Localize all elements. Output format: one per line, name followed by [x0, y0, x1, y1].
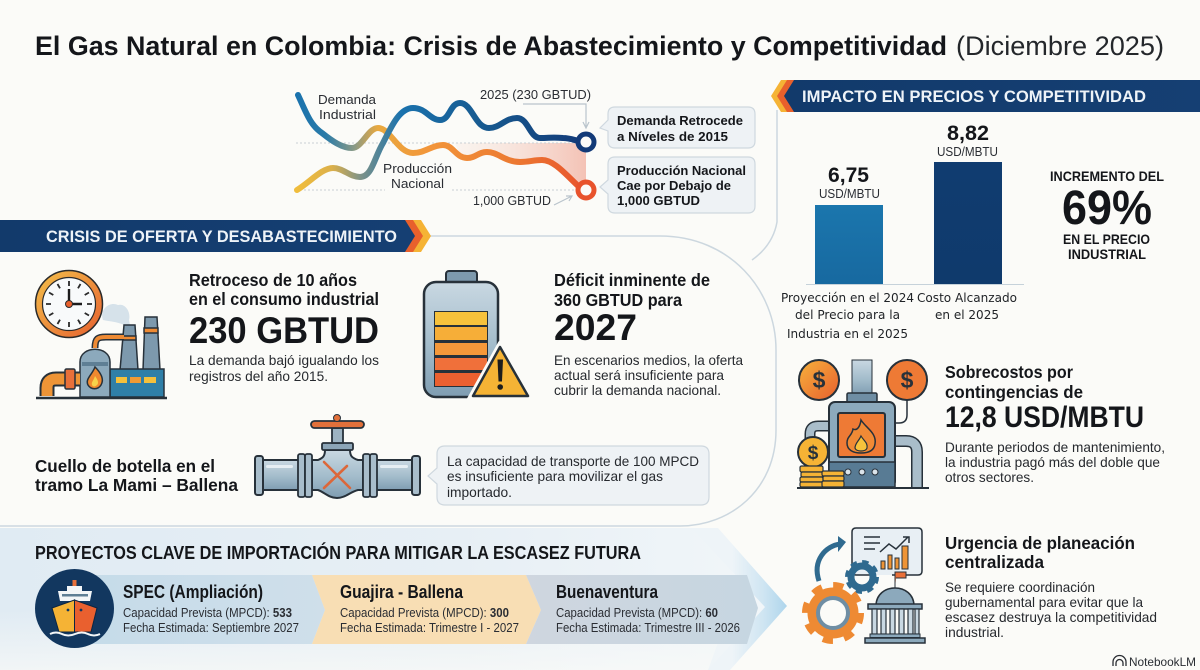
warning sign — [469, 343, 531, 399]
project: Buenaventura: Fecha Estimada: Trimestre III - 2026 — [556, 621, 740, 635]
tank — [80, 349, 110, 397]
bar: 2024 projection — [815, 205, 883, 284]
project: Buenaventura: Buenaventura — [556, 582, 659, 602]
text block: sobrecostos — [945, 362, 1165, 485]
text block: deficit: 2027 — [554, 307, 637, 348]
text block: sobrecostos: otros sectores. — [945, 469, 1034, 485]
icon: ship — [35, 569, 114, 648]
text block: urgencia — [945, 533, 1157, 640]
bar: 2025 cost — [934, 162, 1002, 284]
text block: urgencia: industrial. — [945, 624, 1004, 640]
arrow: 1000 GBTUD — [554, 196, 572, 205]
callout stat: 69 percent: INCREMENTO DEL — [1050, 168, 1164, 184]
chart reference lines — [296, 143, 586, 190]
large gear — [806, 586, 860, 640]
text block: deficit: Déficit inminente de — [554, 270, 710, 290]
project: Guajira - Ballena: Fecha Estimada: Trimestre I - 2027 — [340, 621, 519, 635]
small gear — [848, 563, 876, 591]
coin stacks — [800, 466, 844, 487]
callout stat: 69 percent — [1050, 168, 1164, 262]
text block: cuello de botella: Cuello de botella en el — [35, 456, 215, 476]
title: El Gas Natural en Colombia: Crisis de Abastecimiento y Competitividad — [35, 31, 947, 61]
project: Buenaventura — [526, 575, 758, 644]
ground — [36, 397, 167, 399]
text block: sobrecostos: Durante periodos de mantenimiento, — [945, 439, 1165, 455]
project: SPEC: SPEC (Ampliación) — [123, 582, 263, 602]
text block: retroceso — [189, 270, 379, 384]
label: demanda industrial: Industrial — [319, 108, 376, 122]
callout: capacidad de transporte: es insuficiente para movilizar el gas — [447, 468, 663, 484]
capitol — [876, 588, 914, 606]
banner: crisis de oferta: CRISIS DE OFERTA Y DESABASTECIMIENTO — [46, 227, 397, 246]
callout: capacidad de transporte — [428, 446, 709, 505]
text block: deficit: En escenarios medios, la oferta — [554, 352, 743, 368]
text block: sobrecostos: 12,8 USD/MBTU — [945, 401, 1144, 434]
text block: sobrecostos: contingencias de — [945, 382, 1083, 402]
panel: proyectos clave de importacion — [0, 528, 787, 670]
value: 8,82: USD/MBTU — [937, 145, 998, 159]
label: 2025 value: 2025 (230 GBTUD) — [480, 88, 591, 102]
arrow: 2025 value — [523, 104, 589, 128]
section heading: PROYECTOS CLAVE DE IMPORTACIÓN PARA MITIGAR LA ESCASEZ FUTURA — [35, 542, 641, 563]
text block: urgencia: escasez destruya la competitividad — [945, 609, 1157, 625]
smoke — [102, 304, 131, 330]
left pipe — [47, 379, 80, 396]
value: 6,75: USD/MBTU — [819, 187, 880, 201]
icon: battery with warning — [424, 271, 531, 399]
text block: retroceso: La demanda bajó igualando los — [189, 352, 379, 368]
text block: deficit: actual será insuficiente para — [554, 367, 724, 383]
plant block — [110, 369, 164, 397]
project: SPEC: Capacidad Prevista (MPCD): 533 — [123, 606, 292, 620]
title: (Diciembre 2025) — [956, 31, 1164, 61]
banner: crisis de oferta — [0, 220, 431, 252]
chart shaded gap — [455, 143, 586, 190]
callout stat: 69 percent: INDUSTRIAL — [1068, 246, 1146, 262]
text block: sobrecostos: Sobrecostos por — [945, 362, 1073, 382]
callout: produccion nacional: 1,000 GBTUD — [617, 193, 700, 208]
callout: produccion nacional: Cae por Debajo de — [617, 178, 731, 193]
value: 6,75: 6,75 — [828, 164, 869, 187]
flag — [895, 572, 906, 588]
text block: cuello de botella — [35, 456, 238, 495]
panel: price bar chart — [781, 122, 1024, 341]
callout: demanda retrocede: a Níveles de 2015 — [617, 129, 728, 144]
callout stat: 69 percent: 69% — [1062, 182, 1152, 235]
callout: capacidad de transporte: importado. — [447, 484, 512, 500]
text block: retroceso: registros del año 2015. — [189, 368, 328, 384]
text block: retroceso: 230 GBTUD — [189, 310, 379, 351]
axis — [806, 284, 1024, 286]
callout: produccion nacional — [600, 157, 755, 213]
watermark: NotebookLM: NotebookLM — [1129, 655, 1196, 669]
label: produccion nacional: Producción — [383, 162, 452, 176]
marker: production end point — [578, 182, 594, 198]
banner: impacto en precios: IMPACTO EN PRECIOS Y COMPETITIVIDAD — [802, 87, 1146, 106]
callout: capacidad de transporte: La capacidad de transporte de 100 MPCD — [447, 453, 699, 469]
category label: costo alcanzado — [917, 290, 1017, 322]
line: national production — [298, 95, 585, 192]
text block: urgencia: gubernamental para evitar que la — [945, 594, 1143, 610]
panel: demand and production line chart — [296, 88, 594, 208]
category label: proyeccion: Industria en el 2025 — [787, 326, 908, 341]
marker: demand end point — [578, 134, 594, 150]
icon: planning, gears and government building — [806, 528, 925, 643]
icon: pipeline valve — [255, 414, 420, 498]
panel outline: crisis section — [0, 236, 776, 526]
project: Guajira - Ballena: Capacidad Prevista (MPCD): 300 — [340, 606, 509, 620]
category label: proyeccion: del Precio para la — [795, 307, 900, 322]
value: 6,75 — [819, 164, 880, 201]
label: demanda industrial — [318, 93, 376, 122]
project: Guajira - Ballena: Guajira - Ballena — [340, 582, 464, 602]
line: industrial demand — [297, 103, 585, 190]
connector to impact section — [752, 110, 777, 260]
text block: urgencia: Urgencia de planeación — [945, 533, 1135, 553]
label: produccion nacional — [383, 162, 452, 191]
text block: urgencia: Se requiere coordinación — [945, 579, 1095, 595]
callout stat: 69 percent: EN EL PRECIO — [1063, 231, 1150, 247]
category label: costo alcanzado: en el 2025 — [935, 307, 999, 322]
text block: deficit — [554, 270, 743, 398]
text block: retroceso: Retroceso de 10 años — [189, 270, 357, 290]
text block: cuello de botella: tramo La Mami – Ballena — [35, 475, 238, 495]
value: 8,82 — [937, 122, 998, 159]
text block: deficit: cubrir la demanda nacional. — [554, 382, 721, 398]
label: 1000 GBTUD: 1,000 GBTUD — [473, 194, 551, 208]
big background arrow — [0, 528, 787, 670]
callout: produccion nacional: Producción Nacional — [617, 163, 746, 178]
project: Buenaventura: Capacidad Prevista (MPCD): 60 — [556, 606, 718, 620]
category label: proyeccion — [781, 290, 914, 341]
callout: demanda retrocede — [600, 107, 755, 148]
category label: proyeccion: Proyección en el 2024 — [781, 290, 914, 305]
upper pipe — [95, 337, 124, 348]
banner: impacto en precios — [771, 80, 1200, 112]
icon: boiler with coins — [797, 360, 929, 488]
text block: urgencia: centralizada — [945, 552, 1044, 572]
text block: sobrecostos: la industria pagó más del doble que — [945, 454, 1160, 470]
coin: $ — [813, 367, 826, 393]
category label: costo alcanzado: Costo Alcanzado — [917, 290, 1017, 305]
icon: clock and gas factory — [36, 270, 167, 398]
project: Guajira - Ballena — [312, 575, 541, 644]
text block: deficit: 360 GBTUD para — [554, 290, 682, 310]
coin: $ — [901, 367, 914, 393]
project: SPEC — [75, 575, 325, 644]
clock — [36, 270, 102, 338]
text block: retroceso: en el consumo industrial — [189, 289, 379, 309]
label: produccion nacional: Nacional — [391, 177, 444, 191]
project: SPEC: Fecha Estimada: Septiembre 2027 — [123, 621, 299, 635]
coin: $ — [808, 443, 819, 464]
label: demanda industrial: Demanda — [318, 93, 376, 107]
value: 8,82: 8,82 — [947, 122, 989, 145]
chimneys — [120, 317, 160, 370]
callout: demanda retrocede: Demanda Retrocede — [617, 113, 743, 128]
